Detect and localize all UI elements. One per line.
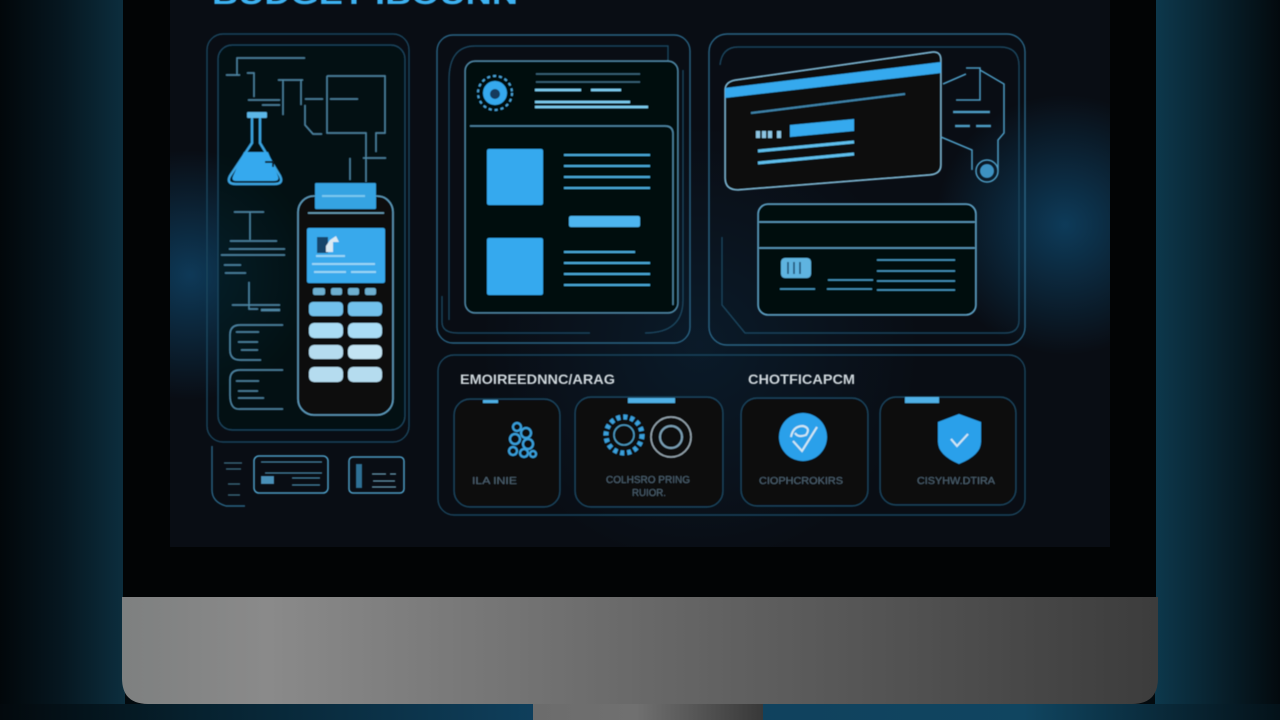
label: ILA INIE [472,476,517,487]
pipe diagram [226,58,386,182]
card 1 [454,399,560,507]
icon: gears [606,417,691,457]
screen content [207,0,1025,515]
back of card [758,204,976,315]
panel: lab and payment terminal [207,34,409,442]
header text lines [535,74,648,107]
text lines 1 [564,155,650,188]
tilted card [725,52,941,190]
robot reader [941,68,1004,182]
card 3 [741,398,868,506]
monitor stand [533,704,763,720]
monitor bezel [123,0,1156,600]
terminal keypad [309,302,382,382]
image block 1 [487,149,543,205]
text lines 2 [564,252,650,285]
small info boxes [230,325,283,409]
label: CIOPHCROKIRS [759,476,843,487]
icon: shield [938,414,981,464]
heading: certification: CHOTFICAPCM [748,371,855,387]
icon: molecule [509,423,536,457]
monitor chin [122,597,1158,704]
card 4 [880,397,1016,505]
icon: seal [478,76,512,110]
screen [170,0,1110,547]
side text lines [221,212,285,310]
panel: engineering and certification [438,355,1025,515]
panel: bottom left widgets [212,446,404,506]
label line 2: RUIOR. [632,488,666,499]
panel: documents [437,35,690,343]
card 2 [575,397,723,507]
label: CISYHW.DTIRA [917,476,995,487]
terminal screen [307,228,385,283]
panel: cards [709,34,1025,345]
icon: approval badge [779,413,827,461]
image block 2 [487,238,543,295]
label: COLHSRO PRING [606,475,690,486]
payment terminal [298,183,393,415]
button [569,216,640,227]
heading: engineering: EMOIREEDNNC/ARAG [460,371,615,387]
terminal small buttons [313,288,376,295]
icon: flask [229,112,281,184]
